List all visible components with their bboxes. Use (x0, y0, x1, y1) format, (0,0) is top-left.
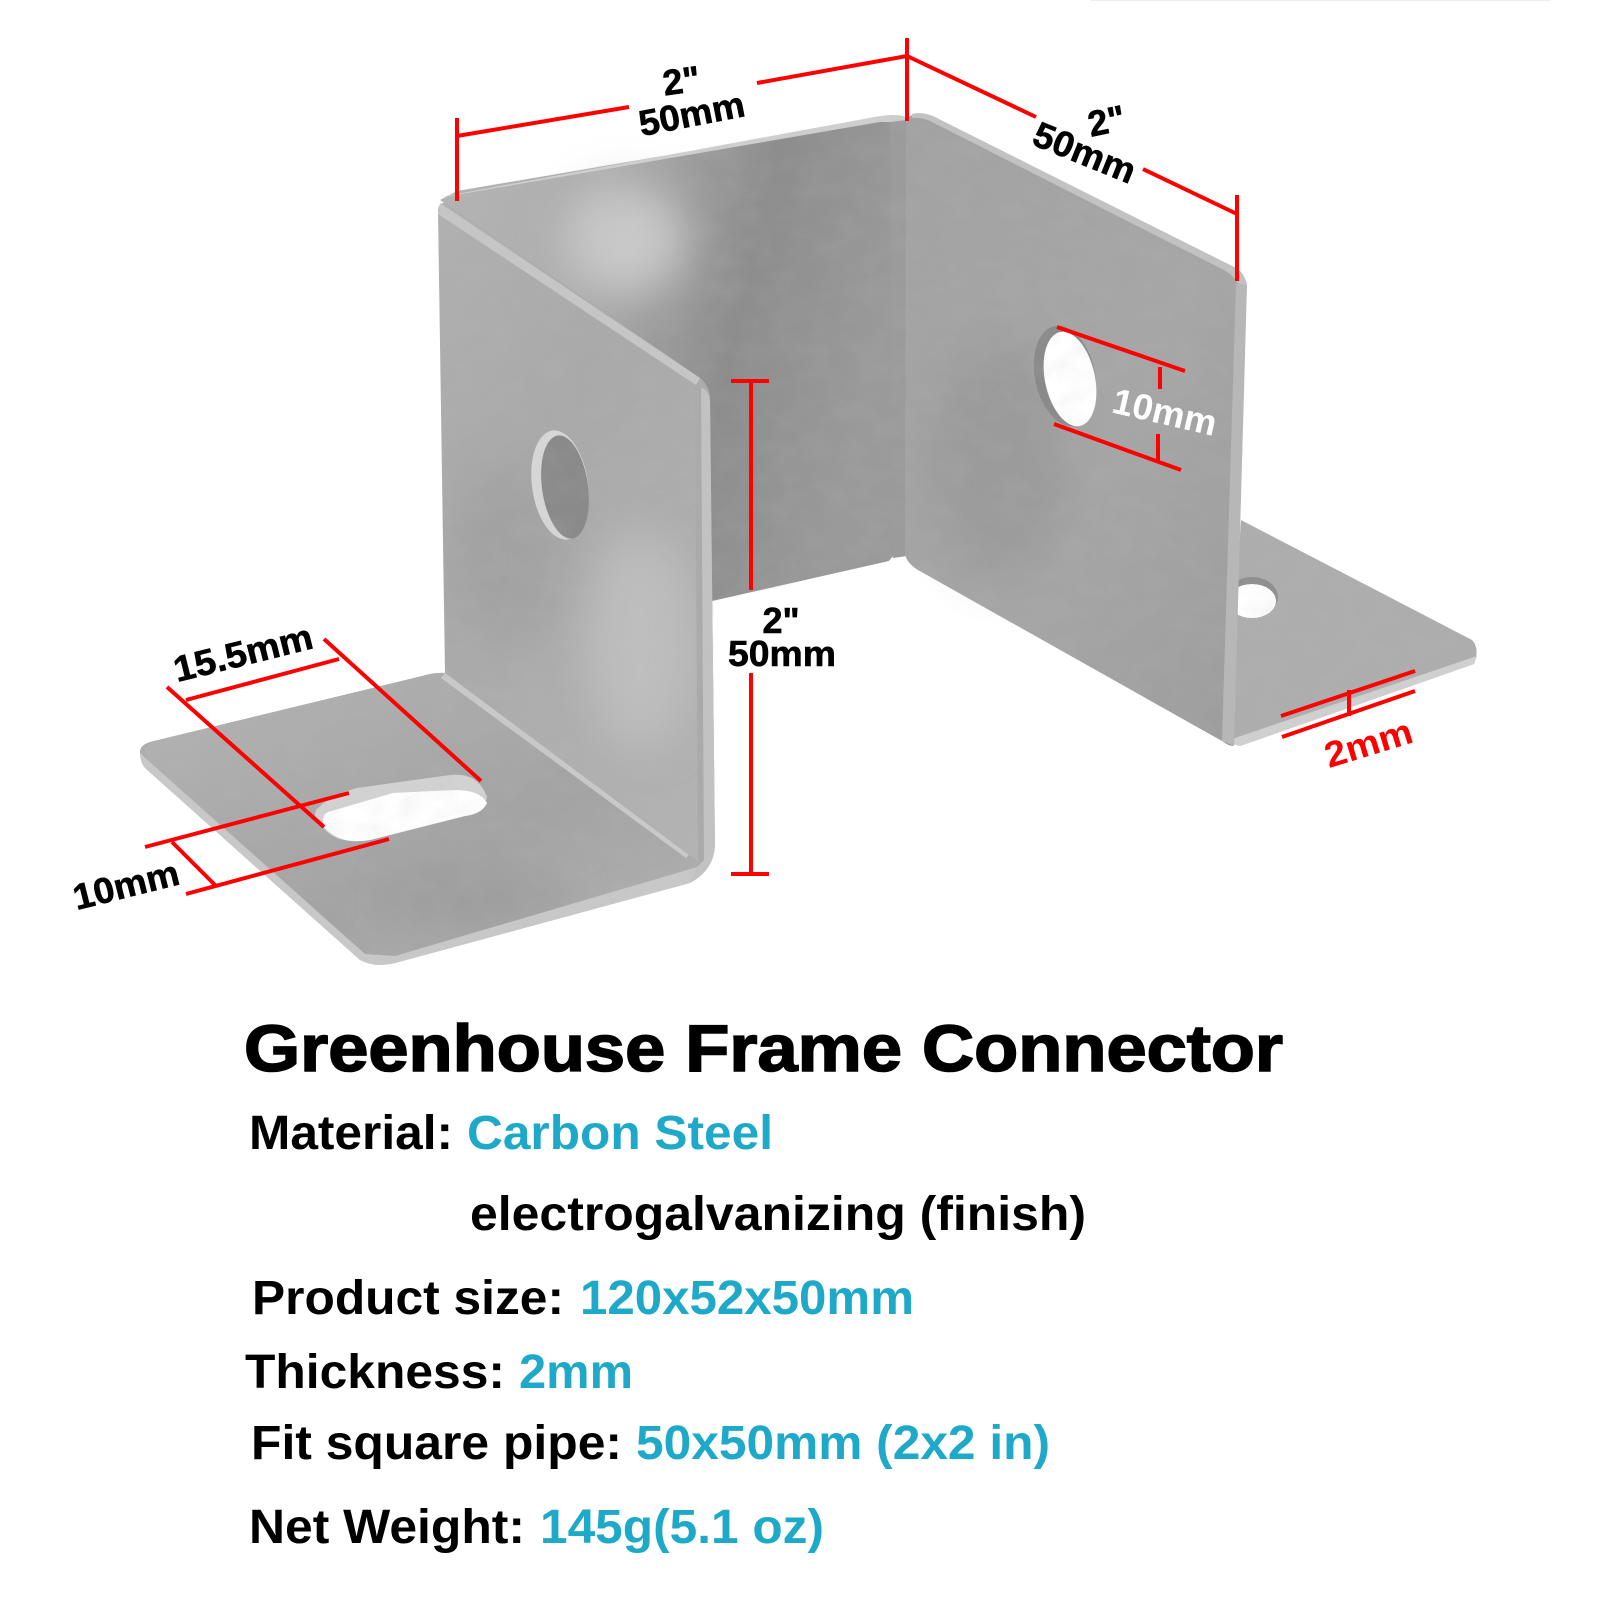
spec: thickness (245, 1346, 633, 1399)
spec: product size (252, 1272, 914, 1325)
right foot with hole (1226, 520, 1477, 746)
dimension: back width 2" 50mm: 50mm (635, 83, 748, 144)
dimension: slot length 15.5mm: 15.5mm (169, 616, 317, 690)
dimension: back width 2" 50mm (457, 56, 907, 201)
dimension: back width 2" 50mm: 2" (660, 58, 702, 104)
dimension: height 2" 50mm (728, 381, 836, 874)
dimension: height 2" 50mm: 2" (762, 600, 800, 641)
dimension: thickness 2mm (1281, 671, 1417, 776)
title: Greenhouse Frame Connector (244, 1011, 1283, 1085)
spec: finish: electrogalvanizing (finish) (470, 1188, 1086, 1241)
faint scan line along top edge (1090, 0, 1550, 1)
metal surface texture (140, 114, 1474, 963)
dimension: height 2" 50mm: 50mm (728, 633, 836, 674)
product photo: metal bracket (140, 113, 1477, 965)
spec: net weight: 145g(5.1 oz) (540, 1501, 824, 1554)
dimension: slot width 10mm: 10mm (69, 852, 183, 918)
spec: square pipe fit: 50x50mm (2x2 in) (636, 1417, 1050, 1470)
dimension: hole diameter 10mm (1054, 327, 1221, 470)
spec: net weight: Net Weight: (249, 1501, 525, 1554)
dimension: hole diameter 10mm: 10mm (1109, 380, 1221, 444)
spec: thickness: 2mm (519, 1346, 633, 1399)
spec: material: Material: (249, 1107, 453, 1160)
spec: square pipe fit: Fit square pipe: (251, 1417, 622, 1470)
dimension: thickness 2mm: 2mm (1319, 710, 1417, 776)
back panel (440, 115, 907, 606)
dimension: side width 2" 50mm: 2" (1084, 97, 1129, 145)
right panel with hole (905, 113, 1247, 746)
spec: net weight (249, 1501, 824, 1554)
dimension: side width 2" 50mm (907, 38, 1237, 281)
spec: product size: 120x52x50mm (580, 1272, 914, 1325)
dimension: side width 2" 50mm: 50mm (1027, 113, 1142, 191)
left panel with hole and left foot (140, 203, 715, 965)
spec: material (249, 1107, 773, 1160)
spec: square pipe fit (251, 1417, 1050, 1470)
spec: thickness: Thickness: (245, 1346, 505, 1399)
dimension: slot length 15.5mm (167, 616, 481, 827)
spec: product size: Product size: (252, 1272, 564, 1325)
spec: material: Carbon Steel (467, 1107, 773, 1160)
dimension: slot width 10mm (69, 793, 389, 918)
